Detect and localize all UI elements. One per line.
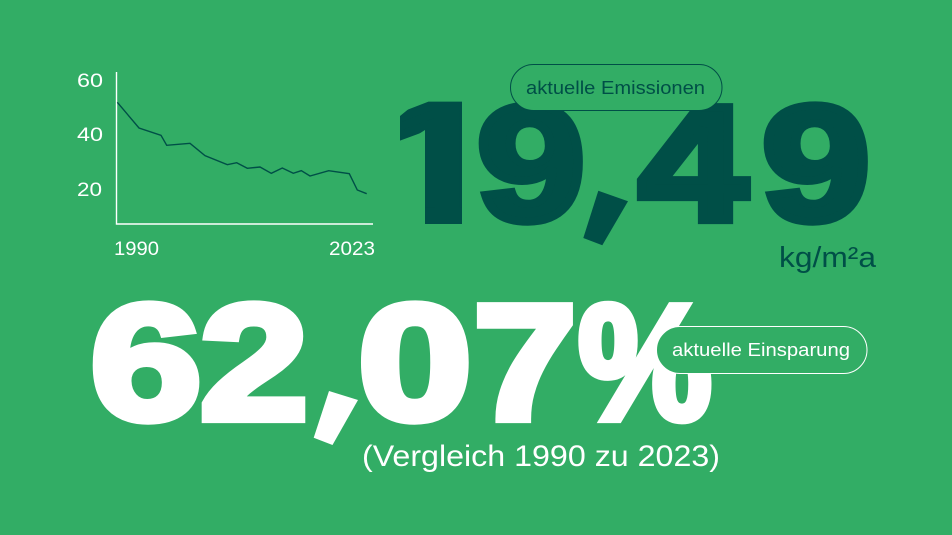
y axis labels: 60 — [77, 71, 103, 92]
big number: 19,49: 1 — [363, 70, 519, 255]
pill label: aktuelle Emissionen: aktuelle Emissionen — [526, 78, 705, 98]
big number: 19,49: 4 — [639, 73, 747, 256]
pill label: aktuelle Einsparung — [656, 326, 867, 374]
unit label: kg/m²a — [779, 242, 877, 274]
big number: 62,07%: % — [578, 272, 712, 454]
big number: 62,07% — [92, 300, 712, 445]
big number: 19,49: 9 — [762, 73, 870, 256]
big number: 19,49 — [400, 101, 868, 246]
big number: 62,07%: 7 — [474, 272, 576, 455]
infographic canvas — [78, 64, 876, 472]
pill label: aktuelle Einsparung: aktuelle Einsparung — [672, 340, 850, 360]
comparison caption: (Vergleich 1990 zu 2023) — [362, 440, 720, 473]
chart data line — [117, 102, 367, 194]
y axis labels: 20 — [77, 180, 102, 201]
y axis labels: 40 — [77, 125, 103, 146]
big number: 62,07%: 6 — [90, 270, 202, 454]
big number: 19,49: 9 — [477, 73, 585, 256]
chart axes — [116, 72, 373, 224]
big number: 62,07%: 0 — [358, 271, 472, 454]
x axis labels: 1990 — [114, 239, 159, 260]
pill label: aktuelle Emissionen — [510, 64, 722, 110]
x axis labels: 2023 — [329, 239, 375, 260]
line chart: emissions 1990 to 2023 — [77, 71, 375, 260]
y axis labels — [77, 71, 103, 201]
x axis labels — [114, 239, 375, 260]
big number: 62,07%: 2 — [200, 272, 308, 455]
